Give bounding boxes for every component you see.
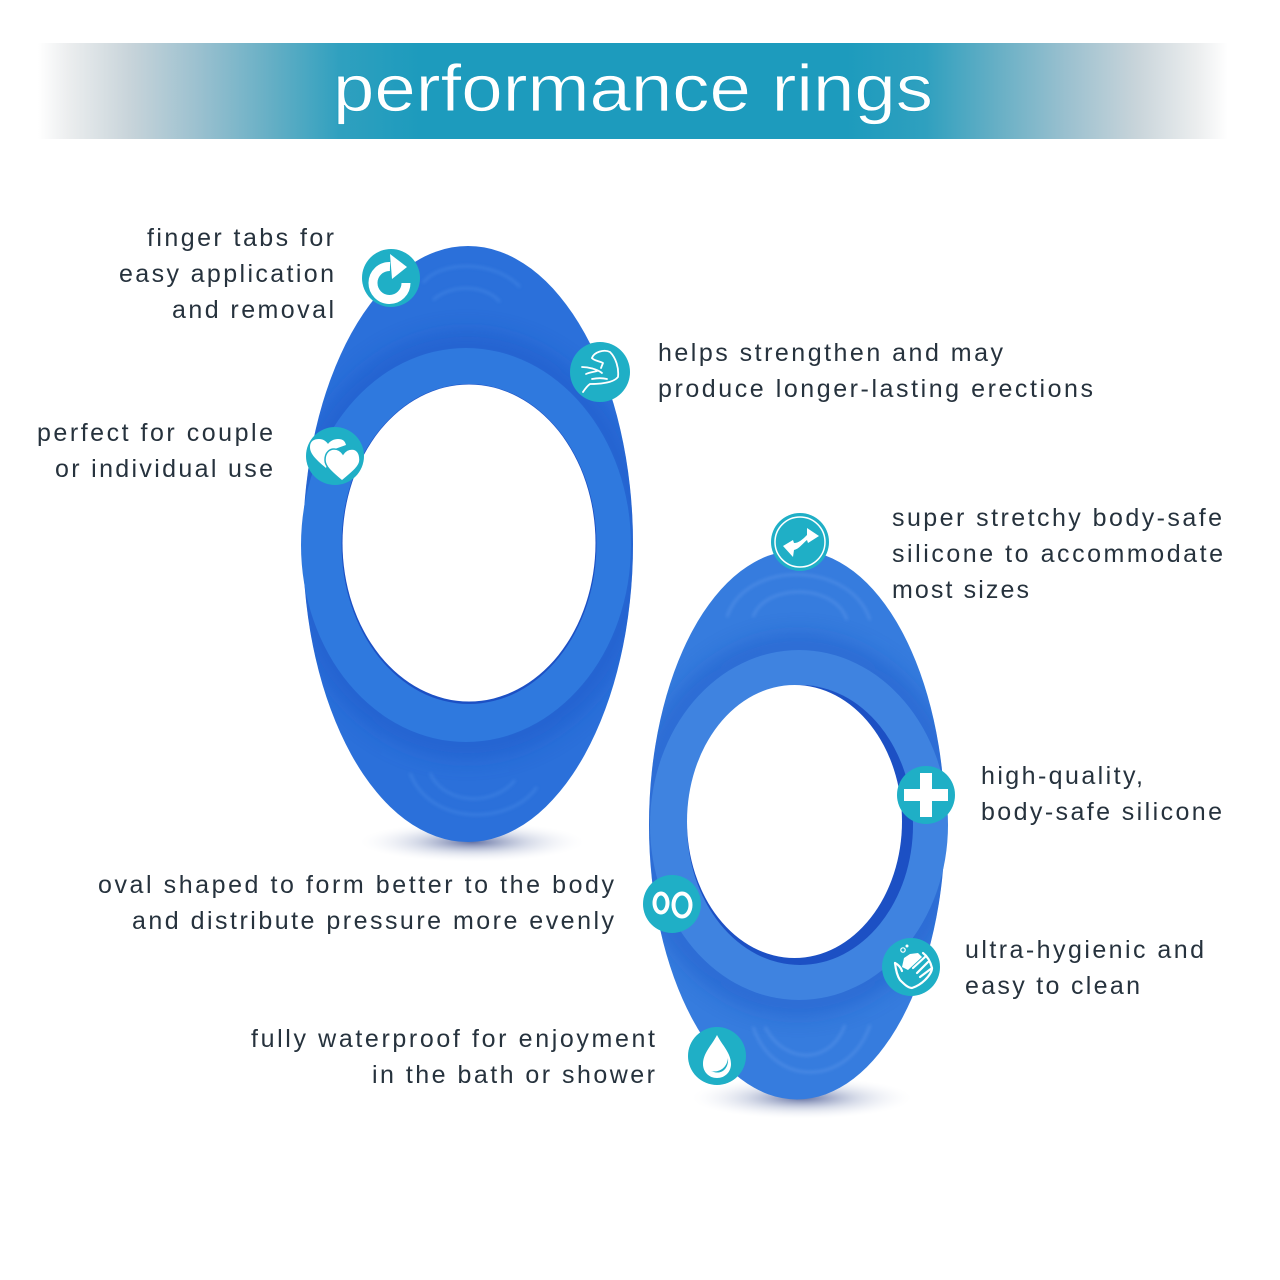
text: silicone: body-safe silicone bbox=[981, 798, 1222, 826]
callout: finger tabs bbox=[119, 224, 420, 324]
icon: two ovals bbox=[643, 875, 701, 933]
text: stretchy: super stretchy body-safe bbox=[892, 504, 1222, 532]
text: strengthen: produce longer-lasting erections bbox=[658, 375, 1093, 403]
callout: strengthen bbox=[570, 339, 1093, 403]
product: upper oval ring bbox=[299, 246, 635, 862]
icon: water drop bbox=[688, 1027, 746, 1085]
bottom tab ridges bbox=[410, 773, 537, 815]
text: oval shaped: oval shaped to form better to the body bbox=[98, 871, 614, 899]
text: stretchy: most sizes bbox=[892, 576, 1029, 604]
ring shadow bbox=[692, 1077, 912, 1119]
text: stretchy: silicone to accommodate bbox=[892, 540, 1223, 568]
oval body bbox=[649, 550, 945, 1100]
text: finger tabs: and removal bbox=[172, 296, 334, 324]
callout: silicone bbox=[897, 762, 1222, 826]
text: waterproof: in the bath or shower bbox=[372, 1061, 655, 1089]
text: silicone: high-quality, bbox=[981, 762, 1143, 790]
ring opening bbox=[687, 685, 902, 958]
icon: washing hands bbox=[882, 938, 940, 996]
top tab ridges bbox=[423, 266, 520, 302]
text: couple: or individual use bbox=[55, 455, 273, 483]
text: hygienic: ultra-hygienic and bbox=[965, 936, 1204, 964]
text: finger tabs: easy application bbox=[119, 260, 334, 288]
contact shade bbox=[299, 345, 635, 745]
title banner bbox=[38, 43, 1228, 139]
icon: stretch arrows bbox=[771, 513, 829, 571]
callout: couple bbox=[37, 419, 364, 485]
icon: flexed arm bbox=[570, 342, 630, 402]
ring opening bbox=[342, 384, 596, 702]
product: lower oval ring bbox=[646, 550, 950, 1119]
text: couple: perfect for couple bbox=[37, 419, 273, 447]
ring band bbox=[301, 348, 631, 742]
text: finger tabs: finger tabs for bbox=[147, 224, 334, 252]
text: oval shaped: and distribute pressure more evenly bbox=[132, 907, 615, 935]
callout: waterproof bbox=[251, 1025, 746, 1089]
text: waterproof: fully waterproof for enjoyment bbox=[251, 1025, 655, 1053]
callout: oval shaped bbox=[98, 871, 701, 935]
contact shade bbox=[646, 647, 950, 1003]
title: performance rings bbox=[333, 51, 933, 125]
ring band bbox=[650, 650, 948, 1000]
ring inner shade bbox=[342, 384, 596, 704]
icon: medical cross bbox=[897, 766, 955, 824]
ring shadow bbox=[360, 822, 584, 862]
icon: rotate arrow bbox=[362, 249, 420, 307]
callout: hygienic bbox=[882, 936, 1204, 1000]
icon: two hearts bbox=[306, 427, 364, 485]
text: hygienic: easy to clean bbox=[965, 972, 1140, 1000]
oval body bbox=[303, 246, 633, 842]
callout: stretchy bbox=[771, 504, 1223, 604]
ring inner shade bbox=[687, 685, 913, 965]
bottom tab ridges bbox=[753, 1025, 870, 1072]
text: strengthen: helps strengthen and may bbox=[658, 339, 1004, 367]
top tab ridges bbox=[727, 575, 870, 620]
